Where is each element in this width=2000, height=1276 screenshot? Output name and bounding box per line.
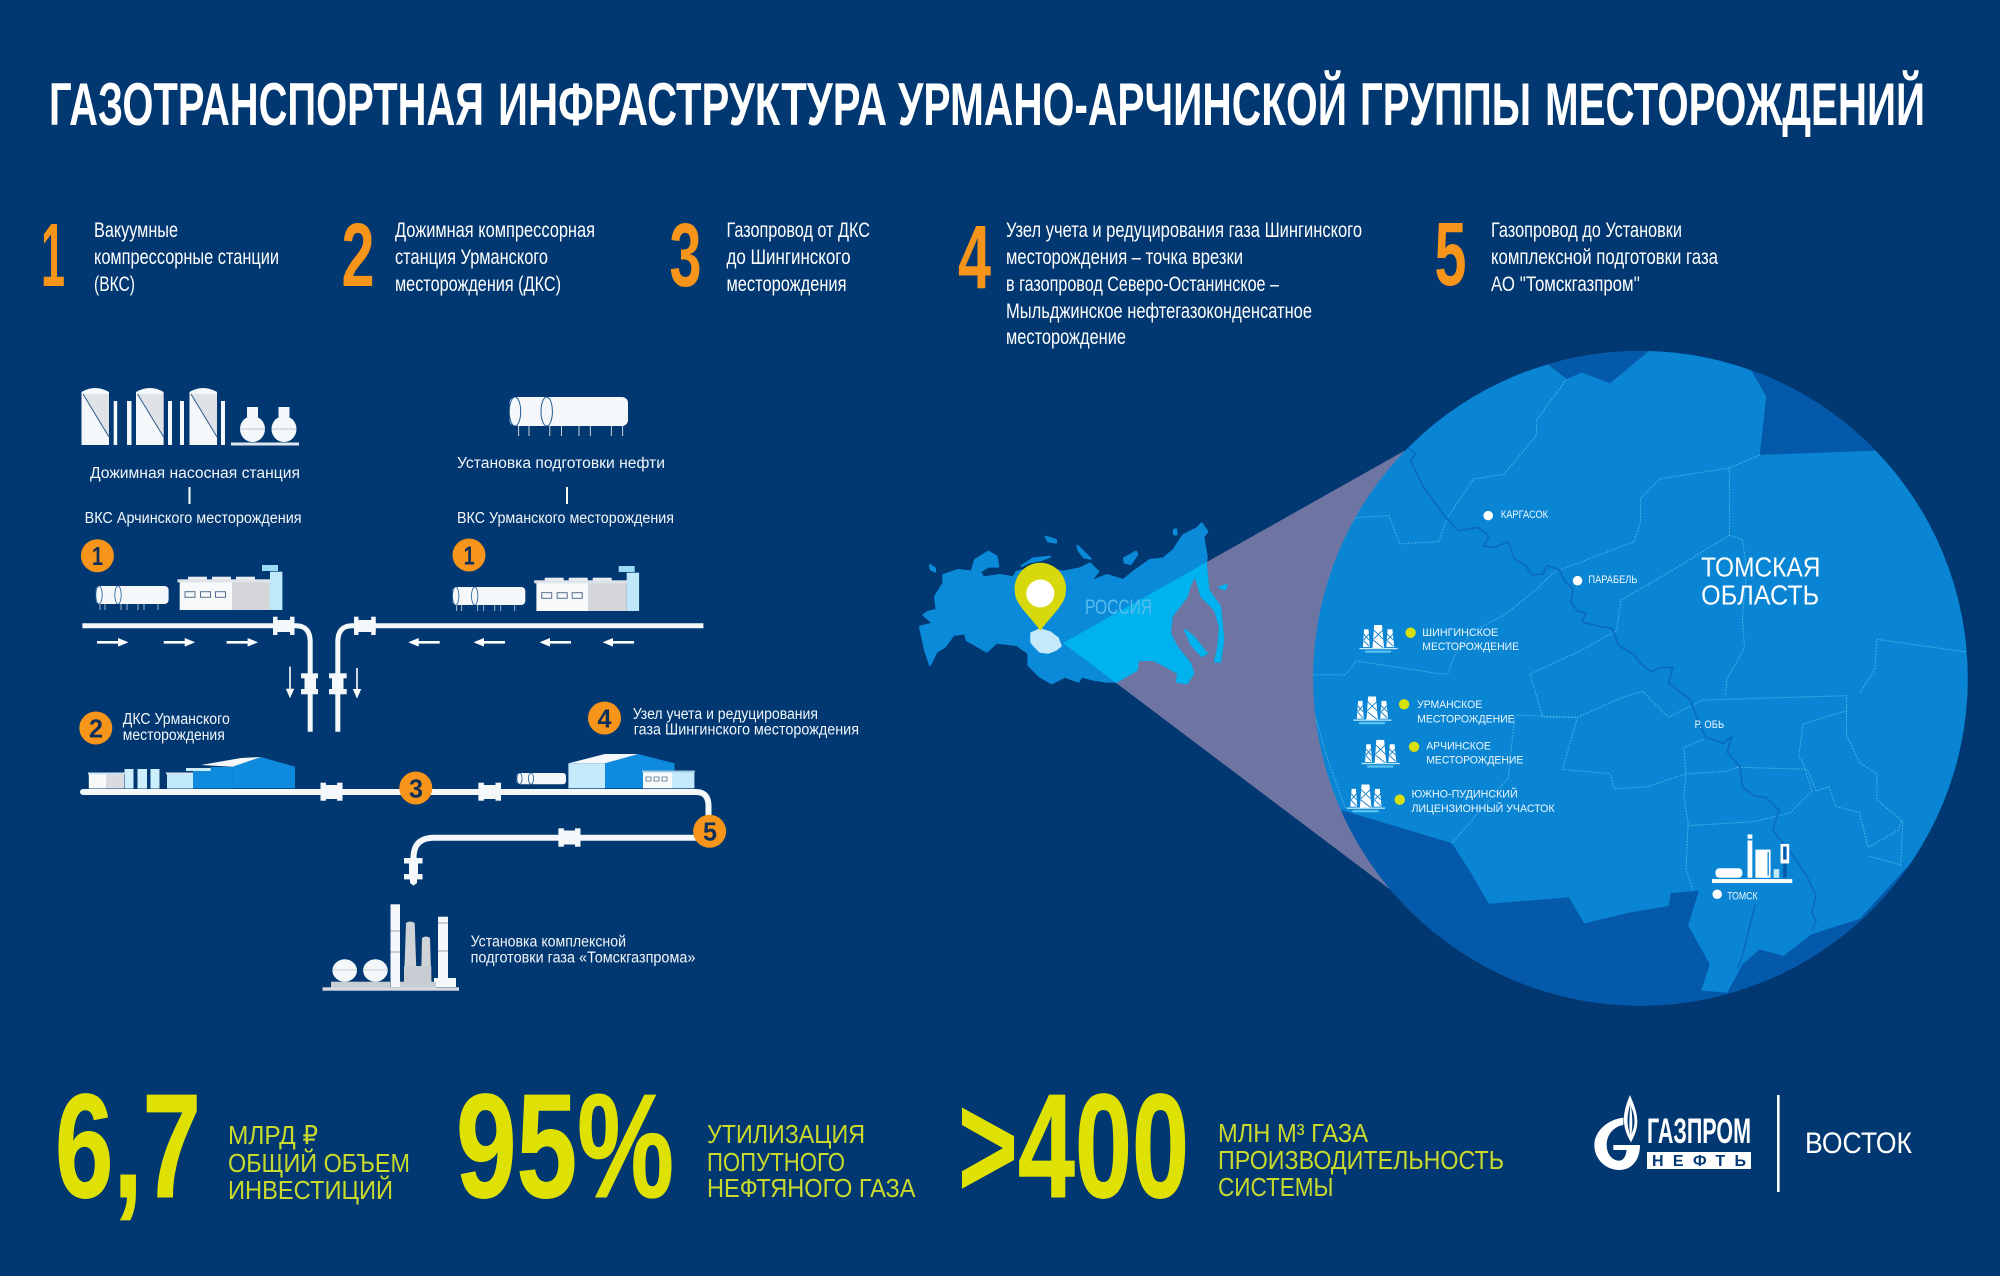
legend text 2: станция Урманского	[395, 245, 548, 269]
legend text 4: Мыльджинское нефтегазоконденсатное	[1006, 299, 1312, 323]
label: Ob river: Р. ОБЬ	[1695, 719, 1724, 731]
field: Archinskoye	[1362, 740, 1523, 768]
stat: investments	[55, 1064, 410, 1229]
marker 1 right: 1	[464, 540, 475, 570]
marker 2 and label: месторождения	[123, 727, 225, 744]
icon: location pin	[1015, 563, 1066, 631]
legend text 5: Газопровод до Установки	[1491, 218, 1682, 242]
stat: gas utilization	[456, 1064, 916, 1229]
label: booster pump station: Дожимная насосная станция	[90, 465, 300, 482]
marker 5	[693, 815, 726, 848]
arrows: flow downward	[286, 667, 361, 699]
logo division name: ВОСТОК	[1805, 1127, 1912, 1160]
regional map: Tomsk oblast	[1309, 340, 1994, 1034]
district borders	[1313, 379, 1968, 889]
label: gas treatment plant	[471, 934, 695, 967]
stat value: >400	[958, 1064, 1189, 1229]
upper pipeline right	[329, 617, 703, 732]
title: ГАЗОТРАНСПОРТНАЯ	[49, 71, 484, 138]
map of Russia	[920, 523, 1227, 683]
legend item 5	[1434, 205, 1718, 305]
title: УРМАНО-АРЧИНСКОЙ	[898, 71, 1347, 138]
field: Shinginskoye	[1359, 625, 1519, 653]
field: Archinskoye: МЕСТОРОЖДЕНИЕ	[1426, 755, 1523, 767]
legend text 3: месторождения	[726, 272, 846, 296]
legend text 5: комплексной подготовки газа	[1491, 245, 1718, 269]
field: Shinginskoye: МЕСТОРОЖДЕНИЕ	[1422, 641, 1519, 653]
stat: system capacity	[958, 1064, 1504, 1229]
city: Parabel: ПАРАБЕЛЬ	[1588, 574, 1637, 586]
marker 1 left: 1	[92, 541, 103, 571]
logo: Gazprom Neft Vostok	[1594, 1095, 1912, 1192]
highlighted part inside cone	[1063, 562, 1228, 684]
stat caption: НЕФТЯНОГО ГАЗА	[707, 1173, 916, 1203]
icon: comprehensive gas treatment plant	[322, 904, 459, 991]
city: Kargasok: КАРГАСОК	[1501, 509, 1549, 521]
label: Archinskoye VKS: ВКС Арчинского месторождения	[85, 510, 302, 527]
label: Tomsk oblast: ТОМСКАЯ	[1701, 551, 1820, 582]
icon: compressor station right	[452, 566, 639, 611]
legend text 5: АО ''Томскгазпром''	[1491, 272, 1640, 296]
legend text 1: Вакуумные	[94, 218, 178, 242]
legend number 5: 5	[1434, 205, 1466, 305]
title: ИНФРАСТРУКТУРА	[498, 71, 887, 138]
icon: DKS compressor plant	[88, 757, 295, 788]
legend number 3: 3	[670, 206, 702, 306]
icon: compressor station left	[96, 565, 282, 610]
legend text 4: месторождение	[1006, 325, 1126, 349]
stat caption	[707, 1119, 916, 1203]
field: Urmanskoye	[1353, 697, 1515, 726]
icon: booster pump station	[82, 388, 299, 446]
legend text 4	[1006, 218, 1362, 349]
zoom cone from Russia map to regional map	[1063, 451, 1500, 897]
title	[49, 71, 1925, 138]
marker 1 right	[452, 538, 486, 572]
field: Archinskoye: АРЧИНСКОЕ	[1426, 740, 1491, 752]
stat value: 95%	[456, 1064, 674, 1229]
field: Yuzhno-Pudinsky: ЮЖНО-ПУДИНСКИЙ	[1411, 788, 1518, 801]
stat caption: СИСТЕМЫ	[1218, 1172, 1334, 1202]
legend text 2: Дожимная компрессорная	[395, 218, 595, 242]
field: Shinginskoye: ШИНГИНСКОЕ	[1422, 627, 1498, 639]
city: Kargasok	[1483, 509, 1549, 521]
legend item 4	[958, 208, 1362, 349]
label: Tomsk oblast	[1701, 551, 1820, 611]
legend text 5	[1491, 218, 1718, 296]
title: ГРУППЫ	[1360, 71, 1531, 138]
stat caption: МЛН М³ ГАЗА	[1218, 1118, 1369, 1148]
legend text 2: месторождения (ДКС)	[395, 272, 561, 296]
marker 5: 5	[703, 817, 717, 847]
legend text 1: (ВКС)	[94, 272, 135, 296]
pipeline diagram	[79, 388, 859, 991]
Russia silhouette	[920, 523, 1227, 683]
label: gas treatment plant: Установка комплексной	[471, 934, 626, 951]
field: Yuzhno-Pudinsky	[1347, 785, 1555, 815]
marker 2 and label: ДКС Урманского	[123, 711, 230, 728]
legend text 2	[395, 218, 595, 296]
marker 2 and label	[79, 711, 230, 744]
stat caption	[228, 1120, 410, 1205]
stat caption: ПОПУТНОГО	[707, 1147, 845, 1177]
marker 3: 3	[409, 773, 423, 803]
pipeline: DKS to node 5	[83, 783, 708, 832]
field: Urmanskoye: МЕСТОРОЖДЕНИЕ	[1417, 714, 1515, 726]
logo sub-band: НЕФТЬ	[1652, 1153, 1746, 1170]
icon: metering node building	[517, 754, 695, 788]
marker 1 left	[81, 539, 114, 572]
stat caption: ПРОИЗВОДИТЕЛЬНОСТЬ	[1218, 1145, 1504, 1175]
river Ob	[1408, 448, 1816, 969]
label: Tomsk oblast: ОБЛАСТЬ	[1701, 580, 1819, 611]
marker 4 and label: газа Шингинского месторождения	[634, 722, 859, 738]
neighbouring regions	[1341, 350, 1908, 1006]
legend text 1: компрессорные станции	[94, 245, 279, 269]
stat caption	[1218, 1118, 1504, 1202]
legend text 3	[726, 218, 870, 296]
legend text 4: месторождения – точка врезки	[1006, 245, 1243, 269]
label: gas treatment plant: подготовки газа «Томскгазпрома»	[471, 950, 695, 967]
label: Urmanskoye VKS: ВКС Урманского месторождения	[457, 510, 674, 527]
marker 2 and label: 2	[89, 713, 103, 743]
arrows: flow to the right	[97, 638, 258, 647]
stat value: 6,7	[55, 1064, 201, 1229]
icon: flame and G	[1594, 1095, 1640, 1170]
legend text 4: в газопровод Северо-Останинское –	[1006, 272, 1279, 296]
legend text 3: Газопровод от ДКС	[726, 218, 870, 242]
logo wordmark: ГАЗПРОМ	[1647, 1112, 1751, 1151]
upper pipeline left	[82, 617, 318, 732]
legend item 1: 1	[41, 206, 65, 306]
field: Urmanskoye: УРМАНСКОЕ	[1417, 699, 1482, 711]
marker 4 and label	[588, 702, 859, 738]
city: Tomsk: ТОМСК	[1727, 890, 1758, 902]
legend text 4: Узел учета и редуцирования газа Шингинского	[1006, 218, 1362, 242]
pipeline: node 5 to gas treatment	[404, 828, 700, 886]
legend text 3: до Шингинского	[726, 245, 851, 269]
legend item 3	[670, 206, 870, 306]
stat caption: УТИЛИЗАЦИЯ	[707, 1119, 865, 1149]
legend number 2: 2	[342, 206, 374, 306]
map circle	[1309, 340, 1994, 1034]
legend item 2	[342, 206, 595, 306]
stat caption: ОБЩИЙ ОБЪЕМ	[228, 1148, 410, 1178]
stat caption: ИНВЕСТИЦИЙ	[228, 1175, 393, 1205]
field: Yuzhno-Pudinsky: ЛИЦЕНЗИОННЫЙ УЧАСТОК	[1411, 802, 1555, 815]
icon: Tomsk plant	[1712, 834, 1792, 883]
icon: oil treatment tank	[509, 397, 628, 436]
legend item 1	[41, 206, 279, 306]
marker 3	[399, 772, 432, 804]
label: oil treatment unit: Установка подготовки нефти	[457, 455, 665, 472]
Tomsk region highlight	[1031, 629, 1061, 653]
label: Russia: РОССИЯ	[1085, 596, 1152, 619]
arrows: flow to the left	[408, 638, 634, 647]
marker 4 and label: 4	[598, 703, 612, 733]
legend number 4: 4	[958, 208, 991, 308]
city: Parabel	[1573, 574, 1637, 586]
stat caption: МЛРД ₽	[228, 1120, 318, 1150]
legend text 1	[94, 218, 279, 296]
marker 4 and label: Узел учета и редуцирования	[633, 706, 818, 723]
city: Tomsk	[1712, 889, 1758, 902]
